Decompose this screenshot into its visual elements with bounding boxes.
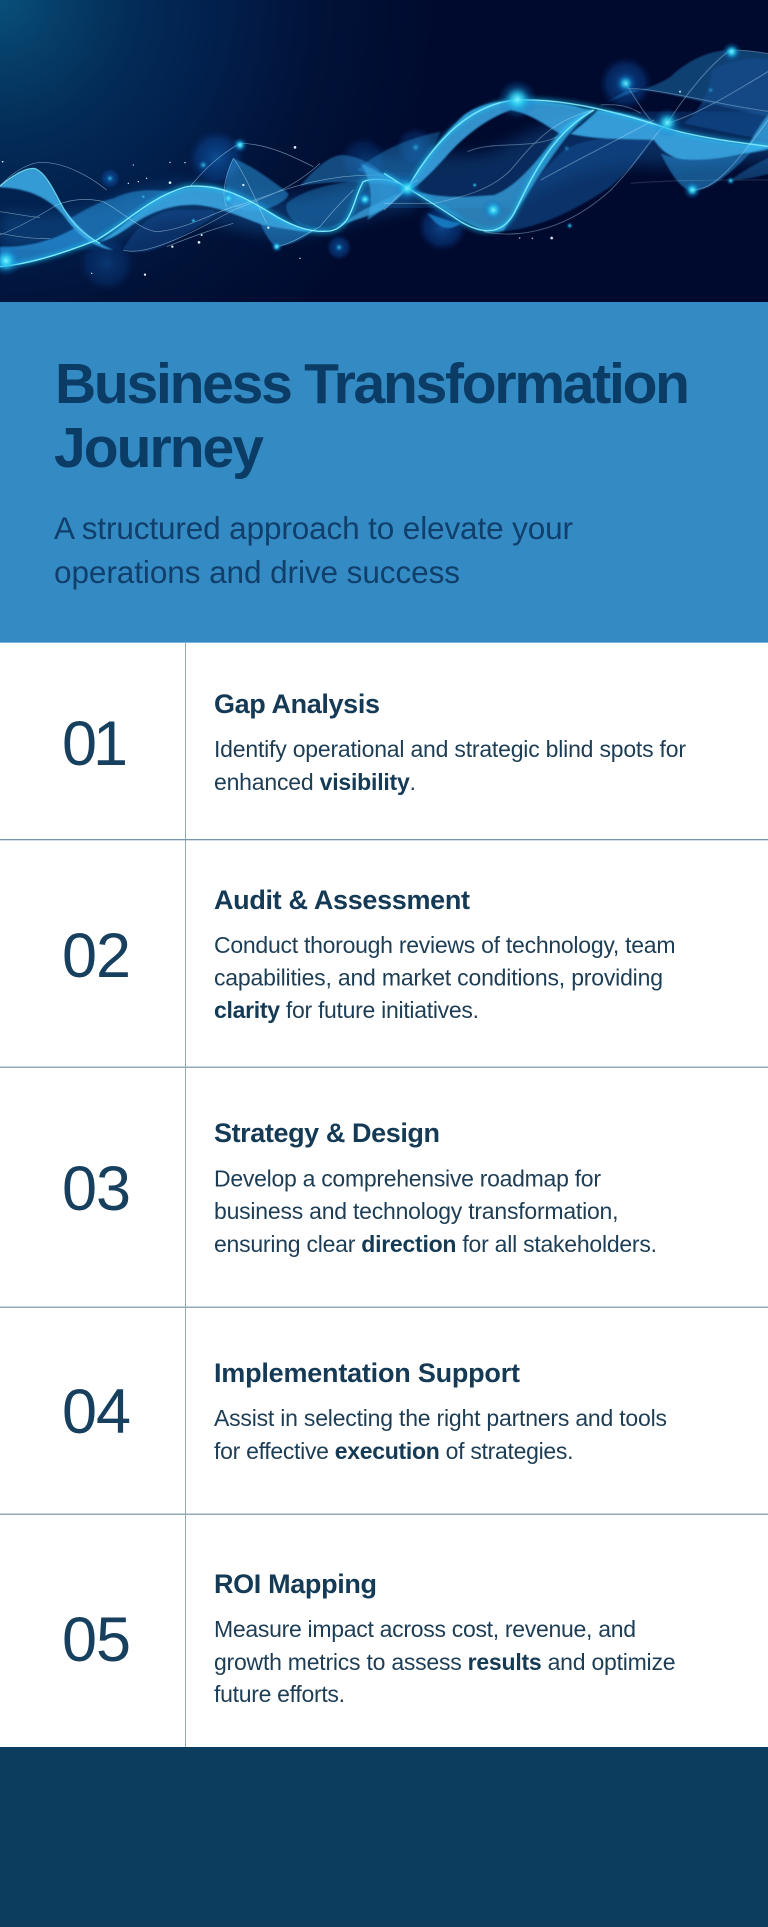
step 4 description bbox=[214, 1405, 667, 1464]
subtitle: A structured approach to elevate your bbox=[54, 510, 573, 546]
footer band bbox=[0, 1747, 768, 1927]
steps white panel bbox=[0, 642, 768, 1747]
step 5 bbox=[62, 1569, 676, 1707]
hero image: glowing blue data waves bbox=[0, 0, 768, 302]
left upper ribbon edge bbox=[0, 169, 100, 243]
subtitle: operations and drive success bbox=[54, 554, 460, 590]
right blue haze bbox=[371, 133, 768, 187]
step 1 description: enhanced visibility. bbox=[214, 769, 416, 795]
step 3 description: business and technology transformation, bbox=[214, 1198, 618, 1224]
step 1 number: 01 bbox=[62, 709, 125, 779]
step 4 description: for effective execution of strategies. bbox=[214, 1438, 574, 1464]
right particles bbox=[519, 91, 681, 239]
step 2 number: 02 bbox=[62, 921, 130, 991]
right bright edge glow bbox=[384, 100, 768, 231]
step 5 description bbox=[214, 1616, 676, 1707]
step 4 number: 04 bbox=[62, 1377, 130, 1447]
step 5 number: 05 bbox=[62, 1605, 130, 1675]
step 3 number: 03 bbox=[62, 1154, 130, 1224]
step 4 description: Assist in selecting the right partners and tools bbox=[214, 1405, 667, 1431]
step 3 title: Strategy & Design bbox=[214, 1118, 440, 1148]
step 2 bbox=[62, 885, 676, 1023]
hero dark background bbox=[0, 0, 768, 302]
left glowing nodes bbox=[0, 137, 373, 277]
left bright edge glow bbox=[0, 179, 407, 267]
step 2 title: Audit & Assessment bbox=[214, 885, 470, 915]
right soft blue blobs bbox=[396, 57, 652, 252]
step 1 description: Identify operational and strategic blind spots for bbox=[214, 736, 686, 762]
step 4 title: Implementation Support bbox=[214, 1358, 520, 1388]
left particles bbox=[2, 146, 301, 276]
step 2 description: Conduct thorough reviews of technology, team bbox=[214, 932, 676, 958]
right mesh ribbons bbox=[357, 50, 768, 232]
right bright edge lines bbox=[384, 100, 768, 231]
step 1 bbox=[62, 689, 686, 795]
step 3 bbox=[62, 1118, 657, 1257]
right glowing nodes bbox=[394, 42, 742, 229]
heading: Journey bbox=[54, 416, 264, 480]
step 2 description: capabilities, and market conditions, providing bbox=[214, 964, 663, 990]
step 2 description: clarity for future initiatives. bbox=[214, 997, 479, 1023]
left mesh ribbons bbox=[0, 155, 407, 267]
left half of wave bbox=[0, 130, 413, 292]
header band bbox=[0, 302, 768, 642]
step 2 description bbox=[214, 932, 676, 1023]
step 5 title: ROI Mapping bbox=[214, 1569, 377, 1599]
step 5 description: Measure impact across cost, revenue, and bbox=[214, 1616, 636, 1642]
subtitle bbox=[54, 510, 573, 590]
step 3 description: ensuring clear direction for all stakeholders. bbox=[214, 1231, 657, 1257]
step 1 description bbox=[214, 736, 686, 795]
left soft blue blobs bbox=[78, 130, 387, 292]
left bright edge line bbox=[0, 179, 407, 267]
step 4 bbox=[62, 1358, 667, 1464]
step 3 description: Develop a comprehensive roadmap for bbox=[214, 1166, 601, 1192]
step 5 description: future efforts. bbox=[214, 1681, 345, 1707]
step 5 description: growth metrics to assess results and optimize bbox=[214, 1649, 676, 1675]
heading: Business Transformation bbox=[55, 352, 690, 416]
left blue haze bbox=[0, 190, 413, 233]
step 3 description bbox=[214, 1166, 657, 1257]
right thin wave lines bbox=[384, 50, 768, 234]
heading bbox=[54, 352, 690, 480]
band background bbox=[0, 302, 768, 642]
right half of wave bbox=[357, 42, 768, 252]
step 1 title: Gap Analysis bbox=[214, 689, 380, 719]
left thin wave lines bbox=[0, 143, 384, 251]
